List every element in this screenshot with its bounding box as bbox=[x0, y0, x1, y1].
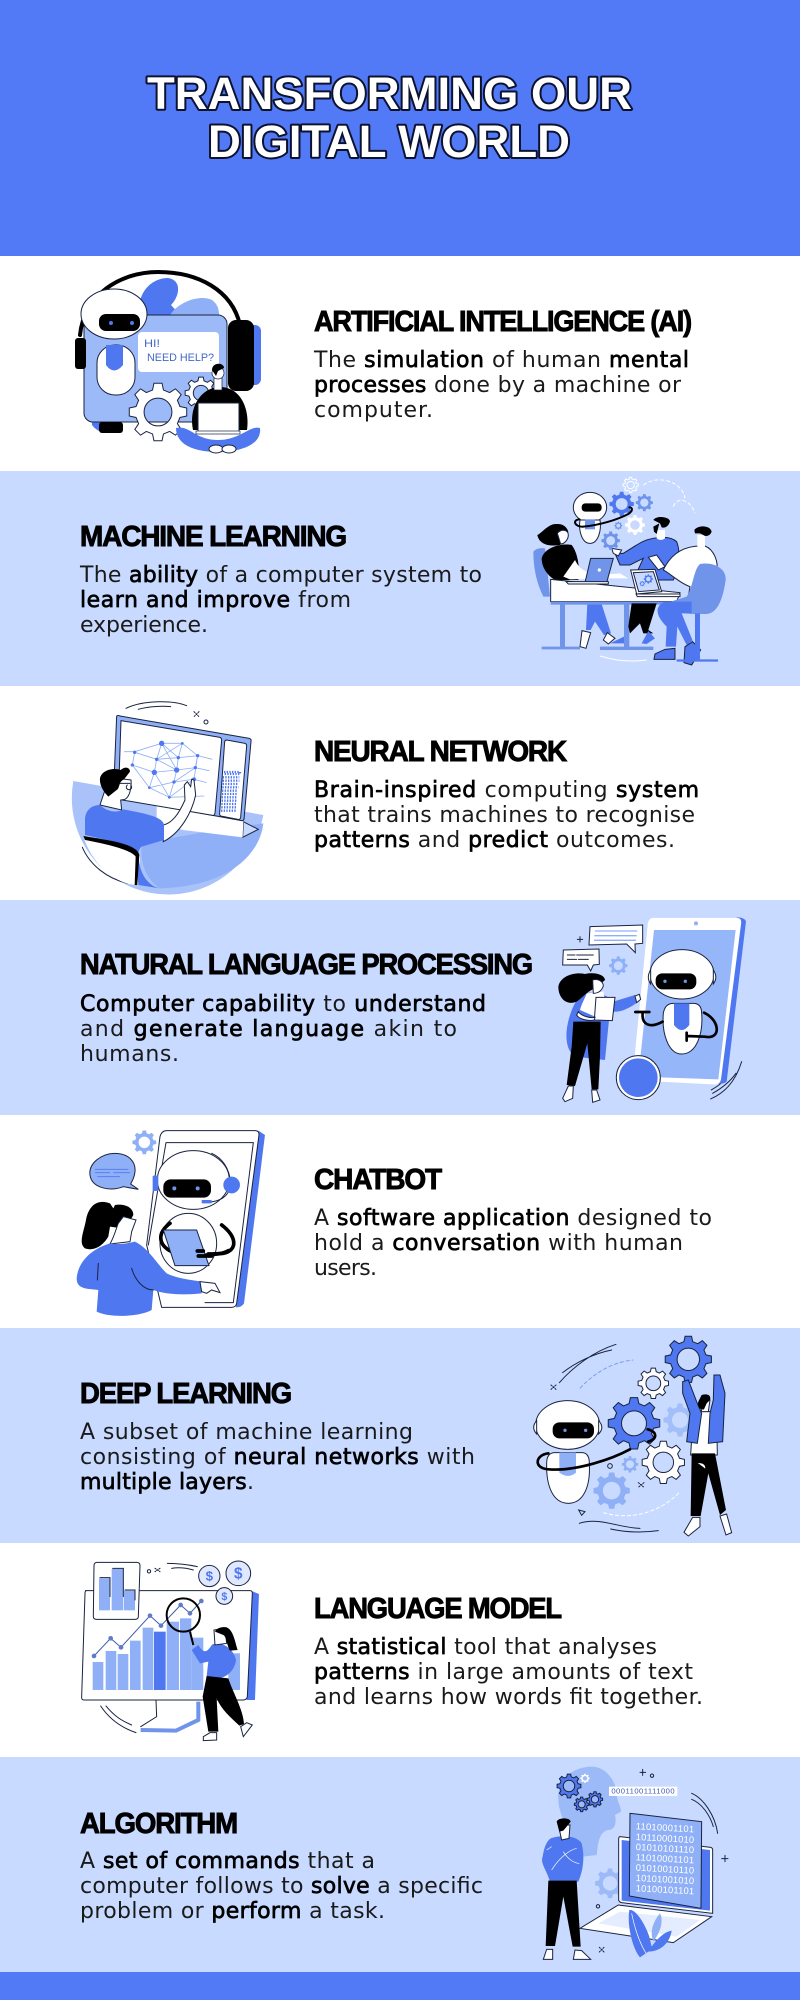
coins: $ bbox=[221, 1591, 227, 1603]
title: TRANSFORMING OUR bbox=[147, 68, 632, 119]
coins: $ bbox=[206, 1569, 214, 1584]
panel: chatbot bbox=[77, 1130, 712, 1316]
binary code: 01010101110 bbox=[636, 1842, 694, 1855]
panel: natural language processing bbox=[80, 917, 746, 1102]
description bbox=[80, 992, 486, 1067]
binary code: 10101001010 bbox=[636, 1873, 694, 1886]
binary code: 01010010110 bbox=[636, 1863, 694, 1876]
description: hold a conversation with human bbox=[314, 1231, 683, 1256]
description bbox=[79, 563, 482, 638]
illustration: data chart analysis bbox=[82, 1561, 259, 1741]
label: binary string: 00011001111000 bbox=[611, 1787, 675, 1796]
description: The simulation of human mental bbox=[313, 348, 689, 373]
panel: algorithm bbox=[80, 1767, 728, 1959]
description: computer. bbox=[314, 398, 433, 423]
illustration: chatbot with woman bbox=[77, 1130, 265, 1316]
description: experience. bbox=[80, 613, 208, 638]
binary code: 11010001101 bbox=[636, 1821, 694, 1834]
text: robot speech: HI! bbox=[144, 338, 160, 350]
binary code bbox=[636, 1821, 694, 1896]
heading: NEURAL NETWORK bbox=[314, 736, 567, 768]
description: A statistical tool that analyses bbox=[314, 1635, 657, 1660]
description: The ability of a computer system to bbox=[79, 563, 482, 588]
illustration: thinking man with binary laptop bbox=[542, 1767, 728, 1959]
description bbox=[314, 778, 699, 853]
text: robot speech bbox=[144, 338, 214, 364]
illustration: person using neural network screen bbox=[72, 702, 263, 894]
description: and generate language akin to bbox=[80, 1017, 457, 1042]
title bbox=[147, 68, 632, 167]
title: DIGITAL WORLD bbox=[208, 116, 570, 167]
description: A set of commands that a bbox=[80, 1849, 375, 1874]
description: Brain-inspired computing system bbox=[314, 778, 699, 803]
panel: deep learning bbox=[80, 1336, 732, 1536]
coins: $ bbox=[234, 1566, 243, 1583]
description bbox=[80, 1849, 483, 1924]
heading: ALGORITHM bbox=[80, 1808, 237, 1840]
description: that trains machines to recognise bbox=[314, 803, 695, 828]
description: and learns how words fit together. bbox=[314, 1685, 703, 1710]
illustration: robot and man with gears bbox=[534, 1336, 732, 1536]
coins bbox=[199, 1561, 251, 1604]
description bbox=[313, 348, 689, 423]
heading: DEEP LEARNING bbox=[80, 1378, 291, 1410]
description: problem or perform a task. bbox=[80, 1899, 385, 1924]
panel: neural network bbox=[72, 702, 699, 894]
description: patterns and predict outcomes. bbox=[314, 828, 675, 853]
illustration: AI helpdesk robot bbox=[75, 272, 261, 453]
panel: artificial intelligence bbox=[75, 272, 692, 453]
heading: MACHINE LEARNING bbox=[80, 521, 346, 553]
description: users. bbox=[314, 1256, 377, 1281]
binary code: 11010001101 bbox=[636, 1852, 694, 1865]
description bbox=[314, 1206, 712, 1281]
illustration: team with robot bbox=[533, 477, 726, 665]
description: A software application designed to bbox=[314, 1206, 712, 1231]
description: A subset of machine learning bbox=[80, 1420, 413, 1445]
binary code: 10110001010 bbox=[636, 1832, 694, 1845]
heading: CHATBOT bbox=[314, 1164, 442, 1196]
description bbox=[314, 1635, 703, 1710]
description: multiple layers. bbox=[80, 1470, 254, 1495]
description: computer follows to solve a specific bbox=[80, 1874, 483, 1899]
description: Computer capability to understand bbox=[80, 992, 486, 1017]
panel: language model bbox=[82, 1561, 703, 1741]
description: processes done by a machine or bbox=[314, 373, 682, 398]
description: learn and improve from bbox=[80, 588, 351, 613]
heading: NATURAL LANGUAGE PROCESSING bbox=[80, 949, 532, 981]
illustration: woman with chatbot phone bbox=[558, 917, 746, 1102]
panel: machine learning bbox=[79, 477, 726, 665]
heading: ARTIFICIAL INTELLIGENCE (AI) bbox=[314, 306, 692, 338]
heading: LANGUAGE MODEL bbox=[314, 1593, 561, 1625]
description: humans. bbox=[80, 1042, 179, 1067]
binary code: 10100101101 bbox=[636, 1883, 694, 1896]
description: consisting of neural networks with bbox=[80, 1445, 475, 1470]
description: patterns in large amounts of text bbox=[314, 1660, 693, 1685]
description bbox=[80, 1420, 475, 1495]
text: robot speech: NEED HELP? bbox=[147, 352, 214, 364]
